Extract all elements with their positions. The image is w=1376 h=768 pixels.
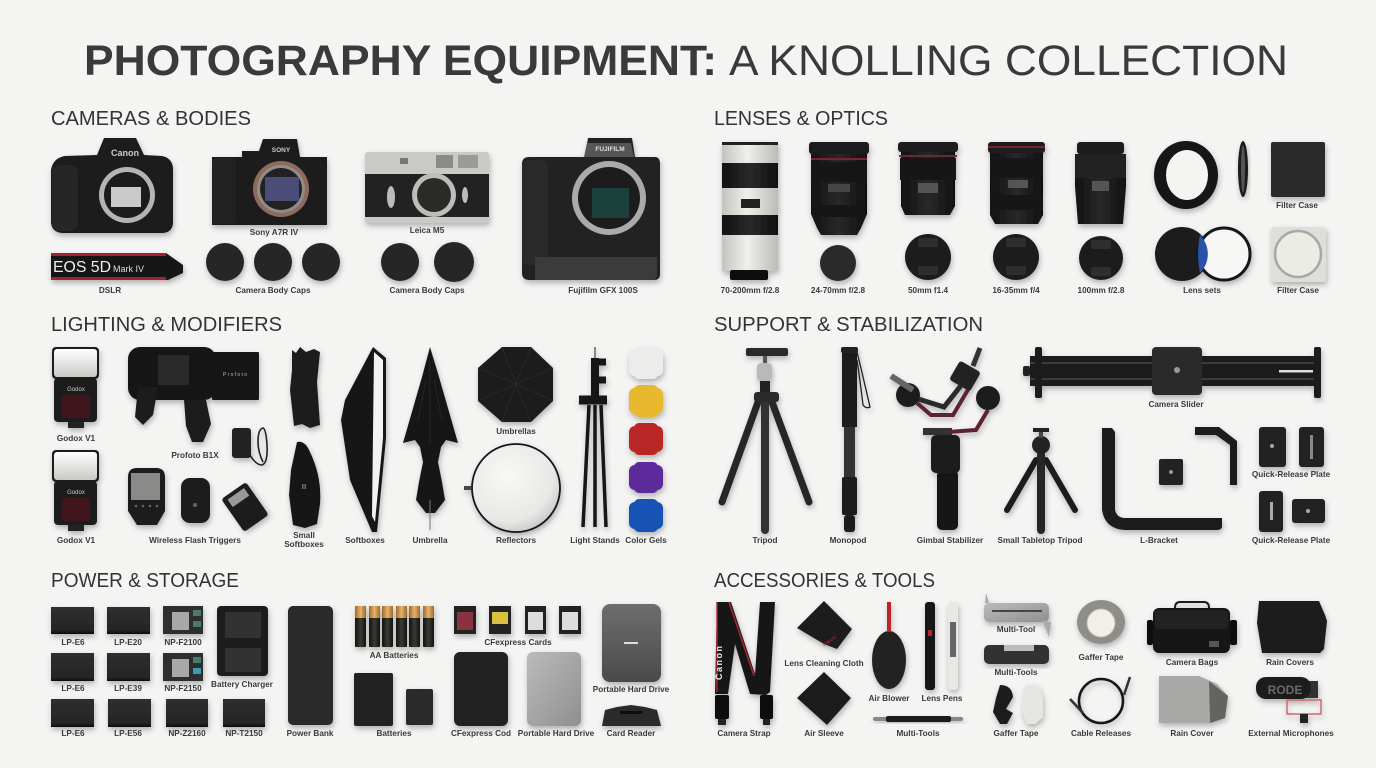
icon: open umbrella	[478, 347, 553, 422]
heading: support: SUPPORT & STABILIZATION	[714, 314, 983, 336]
icon: card reader	[602, 705, 661, 726]
icon: AA batteries	[355, 606, 434, 647]
label: Godox V1	[57, 434, 96, 443]
icon: quick release plates top	[1259, 427, 1324, 467]
icon: EOS strap	[51, 253, 183, 280]
label: Air Blower	[869, 694, 910, 703]
heading: accessories: ACCESSORIES & TOOLS	[714, 570, 935, 592]
icon: telephoto lens	[722, 142, 778, 280]
icon: light stand	[579, 347, 607, 527]
label: Filter Case	[1276, 201, 1318, 210]
icon: 16-35 cap	[993, 234, 1039, 280]
labels: battery names: NP-F2150	[164, 684, 202, 693]
icon: camera batteries	[51, 607, 265, 727]
icon: battery charger	[217, 606, 268, 676]
icon: 50mm cap	[905, 234, 951, 280]
label: Gaffer Tape	[1079, 653, 1124, 662]
icon: multi-tool	[984, 593, 1051, 637]
icon: Fujifilm medium format camera	[522, 138, 660, 280]
label: Multi-Tool	[997, 625, 1035, 634]
heading: cameras: CAMERAS & BODIES	[51, 108, 251, 130]
panel: lenses and optics	[714, 108, 1326, 295]
icon: DSLR camera	[51, 138, 173, 233]
label: Camera Bags	[1166, 658, 1219, 667]
label: Camera Strap	[717, 729, 771, 738]
icon: reflector	[464, 444, 560, 532]
icon: Leica body caps	[381, 242, 474, 282]
icon: tripod	[722, 348, 809, 530]
labels: battery names: LP-E56	[114, 729, 142, 738]
icon: lens pens	[925, 602, 958, 690]
labels: battery names: NP-Z2160	[168, 729, 206, 738]
icon: dark and white gaffer items	[993, 685, 1043, 724]
icon: large battery packs	[354, 673, 433, 726]
icon: Sony mirrorless camera: SONY	[272, 147, 291, 154]
icon: pen horizontal	[873, 716, 963, 722]
label: Rain Cover	[1170, 729, 1214, 738]
labels: battery names: LP-E39	[114, 684, 142, 693]
icon: monopod	[841, 347, 870, 532]
icon: softbox bag	[289, 442, 320, 528]
labels: battery names: NP-F2100	[164, 638, 202, 647]
label: Sony A7R IV	[250, 228, 299, 237]
panel: power and storage	[51, 570, 670, 738]
label: Umbrella	[412, 536, 448, 545]
labels: battery names	[61, 638, 263, 738]
icon: step ring	[1238, 141, 1248, 197]
label: Leica M5	[410, 226, 445, 235]
label: Battery Charger	[211, 680, 274, 689]
icon: lens hood	[1154, 141, 1218, 209]
icon: quick release plates bottom	[1259, 491, 1325, 532]
icon: trigger two	[181, 478, 210, 523]
icon: cable release	[1070, 677, 1130, 723]
panel: accessories and tools	[714, 570, 1334, 738]
label: Fujifilm GFX 100S	[568, 286, 638, 295]
label: Multi-Tools	[896, 729, 940, 738]
labels: battery names: LP-E6	[61, 638, 85, 647]
label: Filter Case	[1277, 286, 1319, 295]
heading: lenses: LENSES & OPTICS	[714, 108, 888, 130]
icon: CFexpress card reader case	[454, 652, 508, 726]
label: Small	[293, 531, 315, 540]
label: Gaffer Tape	[994, 729, 1039, 738]
icon: Leica rangefinder	[365, 152, 489, 223]
icon: grey hard drive	[602, 604, 661, 682]
label: Monopod	[830, 536, 866, 545]
title: PHOTOGRAPHY EQUIPMENT:	[84, 37, 717, 85]
icon: Rode microphone	[1256, 677, 1321, 723]
icon: 100mm cap	[1079, 236, 1123, 280]
label: Quick-Release Plate	[1252, 470, 1331, 479]
icon: side bracket	[1195, 427, 1237, 485]
icon: tabletop tripod	[1007, 428, 1075, 530]
icon: L-bracket	[1102, 428, 1222, 530]
icon: labelled batteries	[163, 606, 203, 681]
icon: 24-70 lens	[809, 142, 869, 235]
label: Air Sleeve	[804, 729, 844, 738]
icon: gimbal stabilizer	[891, 348, 1000, 530]
label: Camera Slider	[1148, 400, 1204, 409]
label: Profoto B1X	[171, 451, 219, 460]
icon: power bank	[288, 606, 333, 725]
labels: battery names: LP-E6	[61, 729, 85, 738]
icon: speedlight 1	[52, 347, 99, 428]
panel: cameras and bodies	[51, 108, 660, 295]
icon: camera bag	[1147, 602, 1237, 653]
label: Quick-Release Plate	[1252, 536, 1331, 545]
icon: filter case dark	[1271, 142, 1325, 197]
labels: battery names: LP-E20	[114, 638, 142, 647]
label: Lens Pens	[922, 694, 963, 703]
icon: black cloth	[797, 672, 851, 725]
label: Camera Body Caps	[389, 286, 465, 295]
icon: silver portable drive	[527, 652, 581, 726]
icon: speedlight 2	[52, 450, 99, 531]
label: Power Bank	[287, 729, 334, 738]
label: CFexpress Cod	[451, 729, 511, 738]
icon: Fujifilm medium format camera: FUJIFILM	[595, 146, 625, 153]
label: L-Bracket	[1140, 536, 1178, 545]
icon: 50mm lens	[898, 142, 958, 215]
label: Card Reader	[607, 729, 656, 738]
label: Small Tabletop Tripod	[998, 536, 1082, 545]
label: Gimbal Stabilizer	[917, 536, 984, 545]
icon: EOS strap: EOS 5D	[53, 259, 111, 276]
icon: softbox bag: |||	[302, 484, 306, 490]
icon: lens filters	[1155, 227, 1250, 281]
icon: cleaning cloth: Canon	[822, 635, 838, 648]
heading: power: POWER & STORAGE	[51, 570, 239, 592]
icon: trigger three	[221, 482, 269, 532]
label: CFexpress Cards	[484, 638, 552, 647]
label: Portable Hard Drive	[593, 685, 670, 694]
icon: Rode microphone: RODE	[1268, 683, 1302, 697]
label: Cable Releases	[1071, 729, 1131, 738]
icon: silver rain cover	[1159, 676, 1228, 723]
label: Batteries	[376, 729, 412, 738]
label: Softboxes	[284, 540, 324, 549]
icon: speedlight 1: Godox	[67, 387, 85, 393]
icon: charger and cord	[232, 428, 267, 465]
title: A KNOLLING COLLECTION	[729, 37, 1288, 85]
label: Lens sets	[1183, 286, 1221, 295]
icon: closed umbrella	[403, 347, 458, 530]
icon: folded softbox	[290, 347, 320, 428]
label: Color Gels	[625, 536, 667, 545]
label: 100mm f/2.8	[1078, 286, 1125, 295]
icon: Sony body caps	[206, 243, 340, 281]
icon: 16-35 lens	[988, 142, 1045, 224]
label: 70-200mm f/2.8	[721, 286, 780, 295]
icon: strip softbox	[341, 347, 386, 532]
label: Softboxes	[345, 536, 385, 545]
icon: Profoto studio strobe	[128, 347, 259, 442]
icon: color gels	[629, 347, 663, 532]
label: Tripod	[752, 536, 778, 545]
icon: clear filter case	[1271, 227, 1326, 282]
icon: 24-70 cap	[820, 245, 856, 281]
icon: camera strap	[714, 602, 775, 725]
icon: small quick plate	[1159, 459, 1183, 485]
icon: multi-tool dark	[984, 645, 1049, 664]
icon: cleaning cloth	[797, 601, 852, 649]
icon: EOS strap: Mark IV	[113, 264, 144, 274]
icon: camera strap: Canon	[714, 646, 724, 680]
label: External Microphones	[1248, 729, 1334, 738]
label: 24-70mm f/2.8	[811, 286, 866, 295]
label: Multi-Tools	[994, 668, 1038, 677]
label: Lens Cleaning Cloth	[784, 659, 864, 668]
icon: speedlight 2: Godox	[67, 490, 85, 496]
label: DSLR	[99, 286, 121, 295]
icon: air blower	[872, 602, 906, 689]
icon: DSLR camera: Canon	[111, 148, 139, 158]
panel: support and stabilization	[714, 314, 1331, 545]
labels: battery names: NP-T2150	[225, 729, 263, 738]
panel: lighting and modifiers	[51, 314, 667, 549]
heading: lighting: LIGHTING & MODIFIERS	[51, 314, 282, 336]
label: AA Batteries	[370, 651, 419, 660]
label: Portable Hard Drive	[518, 729, 595, 738]
icon: 100mm lens	[1075, 142, 1126, 224]
icon: Sony mirrorless camera	[212, 139, 327, 225]
label: Godox V1	[57, 536, 96, 545]
label: Umbrellas	[496, 427, 536, 436]
icon: gaffer tape roll	[1077, 600, 1125, 644]
label: Wireless Flash Triggers	[149, 536, 241, 545]
label: Reflectors	[496, 536, 536, 545]
icon: CFexpress cards	[454, 606, 581, 634]
icon: Profoto studio strobe: Profoto	[223, 372, 247, 378]
label: Light Stands	[570, 536, 620, 545]
icon: black rain cover	[1257, 601, 1327, 653]
label: Rain Covers	[1266, 658, 1314, 667]
icon: camera slider	[1023, 347, 1321, 398]
label: 16-35mm f/4	[992, 286, 1040, 295]
label: Camera Body Caps	[235, 286, 311, 295]
labels: battery names: LP-E6	[61, 684, 85, 693]
label: 50mm f1.4	[908, 286, 948, 295]
icon: trigger one	[128, 468, 165, 525]
